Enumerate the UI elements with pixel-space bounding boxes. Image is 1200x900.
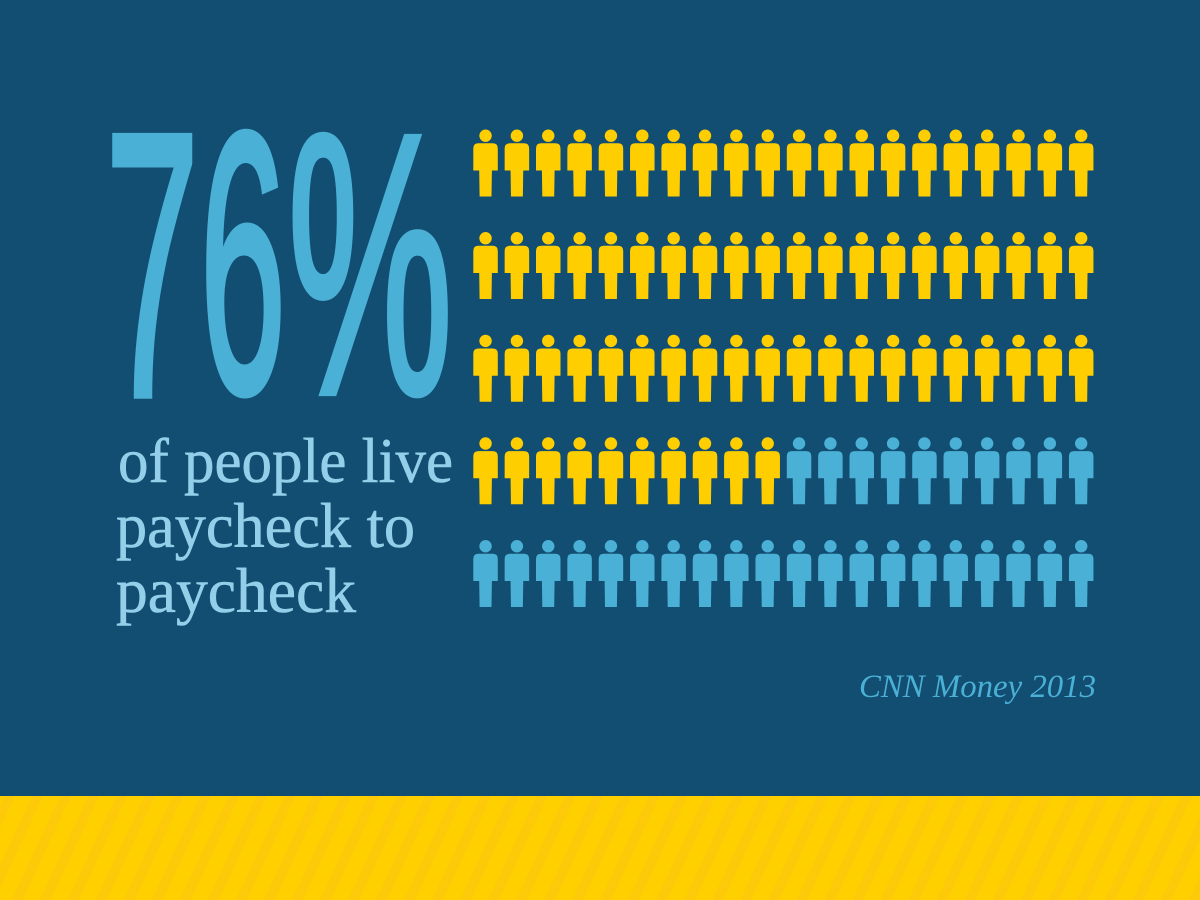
- big number: 76%: 7: [105, 54, 199, 475]
- big number: 76%: 6: [200, 57, 286, 471]
- pictogram: row 5, all blue: [473, 540, 1093, 607]
- footer band: yellow diagonal stripes: [0, 796, 1200, 900]
- big number: 76%: %: [288, 58, 453, 473]
- caption: of people live paycheck to paycheck: paycheck: [116, 555, 356, 626]
- big number: 76%: [105, 54, 453, 475]
- pictogram: row 4, ten yellow and ten blue: [473, 437, 1093, 504]
- source: CNN Money 2013: CNN Money 2013: [859, 669, 1096, 705]
- pictogram: row 3, all yellow: [473, 335, 1093, 402]
- caption: of people live paycheck to paycheck: [116, 425, 453, 626]
- pictogram: row 1, all yellow: [473, 130, 1093, 196]
- caption: of people live paycheck to paycheck: paycheck to: [116, 490, 415, 561]
- pictogram: row 2, all yellow: [473, 232, 1093, 299]
- caption: of people live paycheck to paycheck: of people live: [118, 425, 453, 496]
